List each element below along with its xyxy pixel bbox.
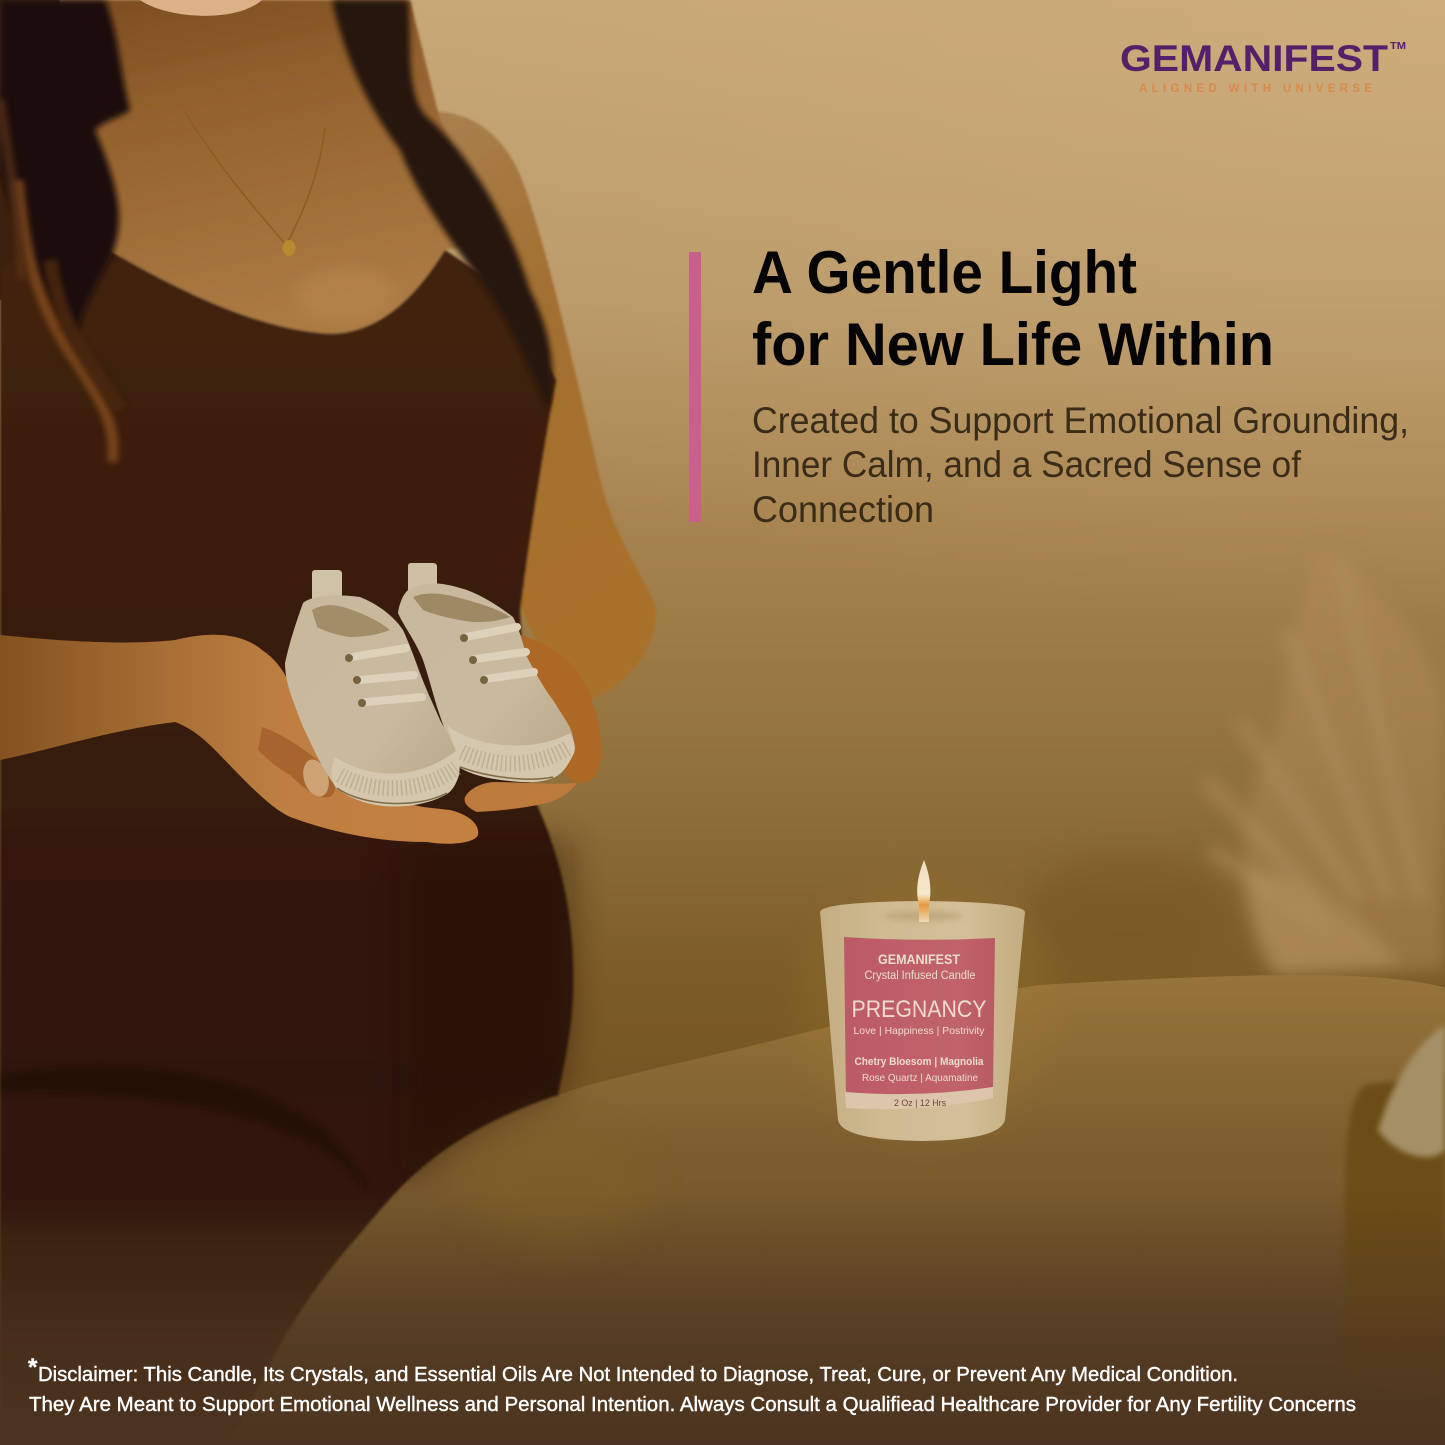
woman: dress [0, 235, 573, 1445]
disclaimer: Disclaimer: This Candle, Its Crystals, and Essential Oils Are Not Intended to Diagnose, Treat, Cure, or Prevent Any Medical Condition. [38, 1364, 1238, 1386]
candle [820, 860, 1025, 1141]
subheading: Created to Support Emotional Grounding, [752, 400, 1409, 441]
candle label text: PREGNANCY [852, 996, 986, 1023]
candle label text: GEMANIFEST [878, 952, 961, 967]
chest highlight [295, 267, 395, 323]
woman: thumb with nail [258, 727, 335, 800]
bottom fade [0, 1190, 1445, 1445]
shoe sole ribs [340, 768, 456, 788]
candle wax top [884, 911, 964, 921]
sofa [228, 975, 1445, 1445]
candle label text: Chetry Bloesom | Magnolia [854, 1056, 984, 1068]
logo [1120, 38, 1406, 95]
heading [752, 239, 1274, 378]
shoe: left [285, 570, 460, 806]
woman: hair [0, 0, 552, 462]
logo: ALIGNED WITH UNIVERSE [1139, 83, 1372, 95]
candle label text [852, 952, 986, 1108]
woman: chest and neck [50, 0, 500, 334]
shoe: right [398, 563, 575, 782]
candle glow [795, 880, 1055, 1140]
woman: right arm and shoulder [425, 112, 656, 700]
woman: front finger [465, 782, 577, 812]
disclaimer: They Are Meant to Support Emotional Wellness and Personal Intention. Always Consult a Qualifiead Healthcare Provider for Any Fertility Concerns [29, 1394, 1356, 1416]
candle label footer [845, 1087, 993, 1109]
heading: for New Life Within [752, 311, 1274, 378]
woman: left forearm and hand [0, 635, 478, 844]
candle label text: Rose Quartz | Aquamatine [862, 1072, 978, 1084]
subheading: Connection [752, 489, 934, 530]
subheading [752, 400, 1409, 530]
heading: A Gentle Light [752, 239, 1137, 306]
woman: chin [140, 0, 262, 16]
disclaimer: * [28, 1354, 38, 1381]
candle flame [917, 860, 930, 922]
necklace [185, 112, 325, 256]
logo: GEMANIFEST [1120, 38, 1388, 79]
candle label text: Love | Happiness | Postrivity [854, 1025, 985, 1037]
logo: TM [1390, 41, 1406, 52]
candle label [844, 937, 995, 1101]
dress: right shade [400, 840, 573, 1190]
candle glass [820, 901, 1025, 1141]
icon: blurred pampas grass [1205, 545, 1445, 975]
baby shoes [285, 563, 575, 806]
subheading: Inner Calm, and a Sacred Sense of [752, 444, 1302, 485]
shoe sole ribs [462, 748, 568, 764]
candle label text: Crystal Infused Candle [864, 970, 976, 982]
candle label text: 2 Oz | 12 Hrs [894, 1098, 946, 1108]
vase [1345, 1025, 1445, 1395]
woman: left side base behind hair [0, 0, 60, 300]
dress: fold shadow [0, 1066, 370, 1195]
disclaimer [28, 1354, 1356, 1416]
accent bar [689, 252, 701, 522]
woman: right hand fingers [500, 635, 602, 783]
